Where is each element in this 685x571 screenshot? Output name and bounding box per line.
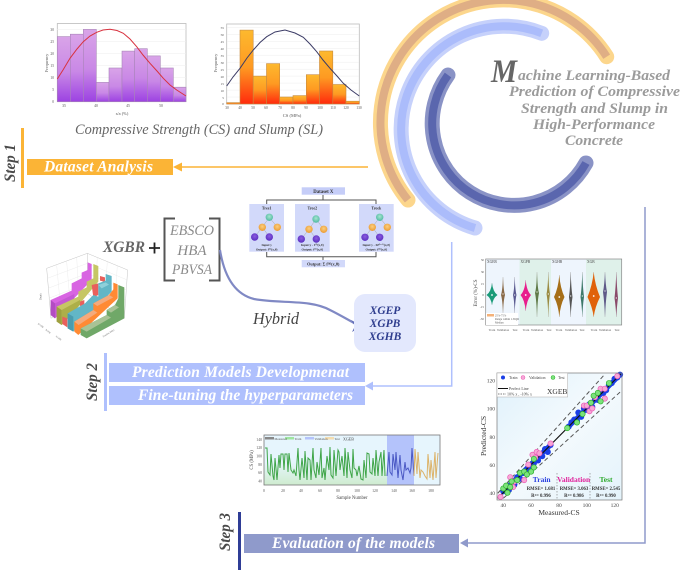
chart: s/a histogram: 10	[50, 76, 54, 80]
title: Prediction of Compressive	[509, 84, 681, 100]
chart: CS histogram: 30	[221, 61, 224, 65]
arrow: rings to step 3	[460, 207, 645, 548]
chart: scatter measured vs predicted: 80	[490, 435, 495, 441]
chart: violin plot: XGHB	[552, 260, 563, 264]
chart: CS histogram: 60	[264, 106, 268, 110]
chart: s/a histogram: 5	[52, 88, 54, 92]
box: Output	[302, 260, 345, 267]
panel: Tree1	[249, 204, 284, 252]
title: Concrete	[565, 133, 624, 149]
arrow: rings to dataset analysis	[173, 162, 368, 172]
legend: scatter: Train	[509, 375, 518, 380]
chart: CS histogram: 120	[343, 106, 349, 110]
chart: CS histogram: 30	[225, 106, 229, 110]
chart: violin plot: Validation	[599, 328, 612, 332]
panel: Treek: Input:y - Σf⁽ᵏ⁻¹⁾(x,θ)	[363, 243, 390, 247]
chart: s/a histogram: 15	[50, 64, 54, 68]
chart: CS histogram: 25	[221, 68, 224, 72]
chart: s/a histogram: Frequency	[44, 53, 49, 72]
chart: violin plot: Train	[591, 328, 598, 332]
chart: violin plot: -15	[480, 305, 484, 309]
chart: violin plot: Test	[547, 328, 552, 332]
title: High-Performance	[532, 117, 656, 133]
chart: s/a histogram: 35	[62, 104, 66, 108]
chart: CS histogram: 40	[221, 47, 224, 51]
chart: violin plot: 15	[481, 282, 484, 286]
chart: time series: 100	[256, 454, 262, 458]
banner: Prediction Models Developmenat: Prediction Models Developmenat	[132, 364, 350, 381]
scatter statistics: Train	[533, 475, 551, 484]
chart: time series: Test	[334, 437, 340, 441]
chart: violin plot: XGEB	[487, 260, 497, 264]
chart: violin plot: Range within 1.5IQR	[495, 318, 519, 321]
scatter statistics: RMSE= 3.063	[560, 487, 589, 492]
chart: violin plot: Test	[513, 328, 518, 332]
chart: scatter measured vs predicted: Measured-CS	[538, 508, 580, 517]
chart: time series: 140	[391, 489, 397, 493]
scatter statistics: Validation	[557, 475, 591, 484]
row: orange bars	[74, 283, 118, 335]
panel: Treek	[359, 204, 394, 252]
chart: violin plot: 25%-75%	[495, 314, 507, 318]
panel: hybrid models: XGPB	[369, 318, 401, 330]
panel: Tree2: Tree2	[307, 206, 317, 210]
scatter statistics: RMSE= 2.545	[592, 487, 621, 492]
chart: violin plot: Test	[580, 328, 585, 332]
arrow: hybrid curve	[220, 250, 362, 332]
chart: time series: 180	[428, 489, 434, 493]
chart: time series: 120	[256, 446, 262, 450]
chart: CS histogram: 10	[221, 89, 224, 93]
chart: time series: 80	[258, 463, 262, 467]
chart: CS histogram: 50	[251, 106, 255, 110]
row: red bars	[62, 276, 105, 327]
chart: CS histogram: 35	[221, 54, 224, 58]
chart: time series: 40	[299, 489, 303, 493]
chart: violin plot: 30	[481, 270, 484, 274]
step 3 label: Step 3	[217, 513, 234, 551]
panel: Treek: Treek	[371, 206, 382, 210]
chart: time series: 0	[263, 489, 265, 493]
label: Hybrid: Hybrid	[252, 309, 299, 328]
chart: violin plot: -30	[480, 317, 484, 321]
chart: CS histogram: 20	[221, 75, 224, 79]
legend: scatter: Test	[558, 375, 565, 380]
panel: Tree2: Input:y - f⁽¹⁾(x,θ)	[301, 243, 324, 247]
chart: violin plot: Train	[523, 328, 530, 332]
panel: hybrid models: XGHB	[368, 331, 402, 343]
chart: violin plot	[474, 258, 622, 332]
points: validation	[498, 373, 620, 500]
box: Output: Output: Σ f⁽ᵏ⁾(x,θ)	[307, 262, 340, 266]
chart: CS histogram: 110	[330, 106, 336, 110]
chart: 3D bar chart	[37, 253, 128, 342]
chart: time series: Train	[294, 437, 302, 441]
bracket: optimizers	[164, 218, 220, 280]
chart: time series	[250, 435, 440, 501]
legend: scatter	[497, 373, 568, 398]
chart: scatter measured vs predicted: 40	[501, 503, 506, 509]
chart: CS histogram: 40	[238, 106, 242, 110]
chart: CS histogram: 15	[221, 82, 224, 86]
chart: time series: 140	[256, 438, 262, 442]
chart: violin plot: Test	[615, 328, 620, 332]
chart: time series: 20	[281, 489, 285, 493]
panel: Treek: Output: f⁽ᵏ⁾(x,θ)	[365, 248, 387, 252]
chart: scatter measured vs predicted: Predicted-CS	[479, 416, 488, 456]
chart: scatter measured vs predicted: 120	[611, 503, 619, 509]
chart: s/a histogram: 0	[52, 100, 54, 104]
chart: CS histogram: 90	[304, 106, 308, 110]
chart: time series: Measured	[274, 437, 287, 441]
chart: scatter measured vs predicted: 100	[583, 503, 591, 509]
scatter statistics: R²= 0.986	[564, 493, 584, 499]
row: olive bars	[57, 264, 98, 325]
legend: scatter: Perfect Line	[509, 386, 529, 391]
scatter statistics: R²= 0.990	[596, 493, 616, 499]
bracket: optimizers: HBA	[176, 243, 207, 259]
chart: s/a histogram: s/a (%)	[116, 111, 129, 116]
chart: violin plot: 50	[481, 258, 484, 262]
legend: scatter: 10% x , -10% x	[507, 392, 532, 398]
title: achine Learning-Based	[518, 68, 671, 84]
row: pink bars	[51, 262, 92, 318]
caption: Compressive Strength and Slump: Compressive Strength (CS) and Slump (SL)	[75, 122, 323, 138]
step 2 label	[84, 353, 107, 411]
chart: CS histogram: 50	[221, 33, 224, 37]
row: teal bars	[68, 274, 112, 332]
banner: Fine-tuning the hyperparameters: Fine-tuning the hyperparameters	[137, 387, 353, 404]
chart: time series: 60	[318, 489, 322, 493]
chart: s/a histogram: 25	[50, 40, 54, 44]
chart: 3D bar chart: Depth	[40, 293, 43, 300]
panel: Tree2	[295, 204, 330, 252]
chart: scatter measured vs predicted	[479, 372, 623, 517]
chart: CS histogram: Frequency	[213, 53, 218, 72]
panel: Tree1: Tree1	[262, 206, 272, 210]
chart: violin plot: Median	[495, 322, 504, 324]
box: Dataset X: Dataset X	[313, 190, 334, 195]
chart: violin plot: Error (%)-CS	[474, 279, 479, 307]
legend: scatter: Validation	[529, 375, 545, 380]
chart: time series: 160	[409, 489, 415, 493]
step 2 label: Step 2	[84, 363, 101, 401]
chart: violin plot: Validation	[565, 328, 578, 332]
chart: s/a histogram: 40	[94, 104, 98, 108]
panel: hybrid models: XGEP	[369, 305, 401, 317]
legend: scatter: XGEB	[547, 387, 567, 396]
chart: violin plot: Train	[556, 328, 563, 332]
chart: 3D bar chart: Number Index	[102, 328, 116, 338]
chart: scatter measured vs predicted: 120	[487, 378, 495, 384]
banner: Dataset Analysis: Dataset Analysis	[43, 158, 153, 176]
chart: time series: 40	[258, 480, 262, 484]
chart: CS histogram: CS (MPa)	[283, 113, 302, 118]
panel: Tree1: Output: f⁽¹⁾(x,θ)	[256, 248, 277, 252]
title	[490, 54, 681, 149]
chart: s/a histogram: 20	[50, 52, 54, 56]
banner: Evaluation of the models: Evaluation of the models	[271, 535, 435, 552]
title: Strength and Slump in	[521, 101, 668, 117]
panel: Tree1: Input:y	[262, 243, 272, 247]
row: green bars	[81, 285, 124, 338]
chart: s/a histogram: 50	[159, 104, 163, 108]
graphic: concentric title rings	[380, 0, 607, 228]
step 3 label	[217, 512, 241, 570]
scatter statistics: R²= 0.996	[531, 493, 551, 499]
arrow: rings to step 2	[365, 242, 452, 390]
chart: time series: 60	[258, 471, 262, 475]
chart: CS histogram	[213, 24, 362, 118]
chart: time series: 80	[336, 489, 340, 493]
chart: 3D bar chart: XGEB	[55, 335, 62, 342]
points: test	[501, 380, 612, 495]
scatter statistics: RMSE= 1.681	[527, 487, 556, 492]
diagram: XGBoost trees	[249, 187, 394, 267]
title: M	[490, 54, 518, 90]
bracket: optimizers: EBSCO	[169, 223, 214, 239]
scatter statistics	[527, 475, 621, 499]
chart: 3D bar chart: XGHB	[37, 322, 44, 329]
banner: Evaluation of the models	[244, 534, 459, 553]
bracket: optimizers: PBVSA	[171, 262, 213, 278]
label: XGBR plus: XGBR	[102, 239, 145, 256]
chart: scatter measured vs predicted: 40	[490, 491, 495, 497]
chart: time series: 120	[372, 489, 378, 493]
chart: scatter measured vs predicted: 60	[490, 463, 495, 469]
step 1 label	[2, 128, 24, 188]
chart: scatter measured vs predicted: 80	[556, 503, 562, 509]
chart: time series: Sample Number	[336, 496, 368, 501]
chart: violin plot: XGPB	[520, 260, 531, 264]
chart: violin plot: XGB	[587, 260, 595, 264]
chart: CS histogram: 130	[356, 106, 362, 110]
chart: s/a histogram: 30	[50, 28, 54, 32]
chart: time series: XGEB	[343, 436, 354, 442]
chart: violin plot: Validation	[531, 328, 544, 332]
chart: time series: 100	[354, 489, 360, 493]
chart: CS histogram: 45	[221, 40, 224, 44]
step 1 label: Step 1	[2, 144, 19, 182]
chart: CS histogram: 0	[222, 102, 224, 106]
chart: s/a histogram: 45	[126, 104, 130, 108]
chart: scatter measured vs predicted: 60	[528, 503, 534, 509]
chart: scatter measured vs predicted: 100	[487, 406, 495, 412]
chart: 3D bar chart: XGPB	[44, 328, 51, 335]
panel: hybrid models	[354, 294, 416, 352]
scatter statistics: Test	[599, 475, 613, 484]
chart: s/a histogram	[44, 24, 186, 116]
chart: CS histogram: 70	[278, 106, 282, 110]
chart: violin plot: 0	[482, 293, 484, 297]
chart: violin plot: Validation	[497, 328, 510, 332]
chart: time series: CS (MPa)	[250, 450, 255, 470]
chart: CS histogram: 55	[221, 26, 224, 30]
chart: violin plot: Train	[489, 328, 496, 332]
chart: CS histogram: 100	[317, 106, 323, 110]
panel: Tree2: Output: f⁽²⁾(x,θ)	[302, 248, 323, 252]
box: Dataset X	[302, 187, 345, 195]
chart: CS histogram: 5	[222, 96, 224, 100]
chart: time series: Validation	[314, 437, 328, 441]
points: train	[500, 372, 623, 494]
chart: CS histogram: 80	[291, 106, 295, 110]
